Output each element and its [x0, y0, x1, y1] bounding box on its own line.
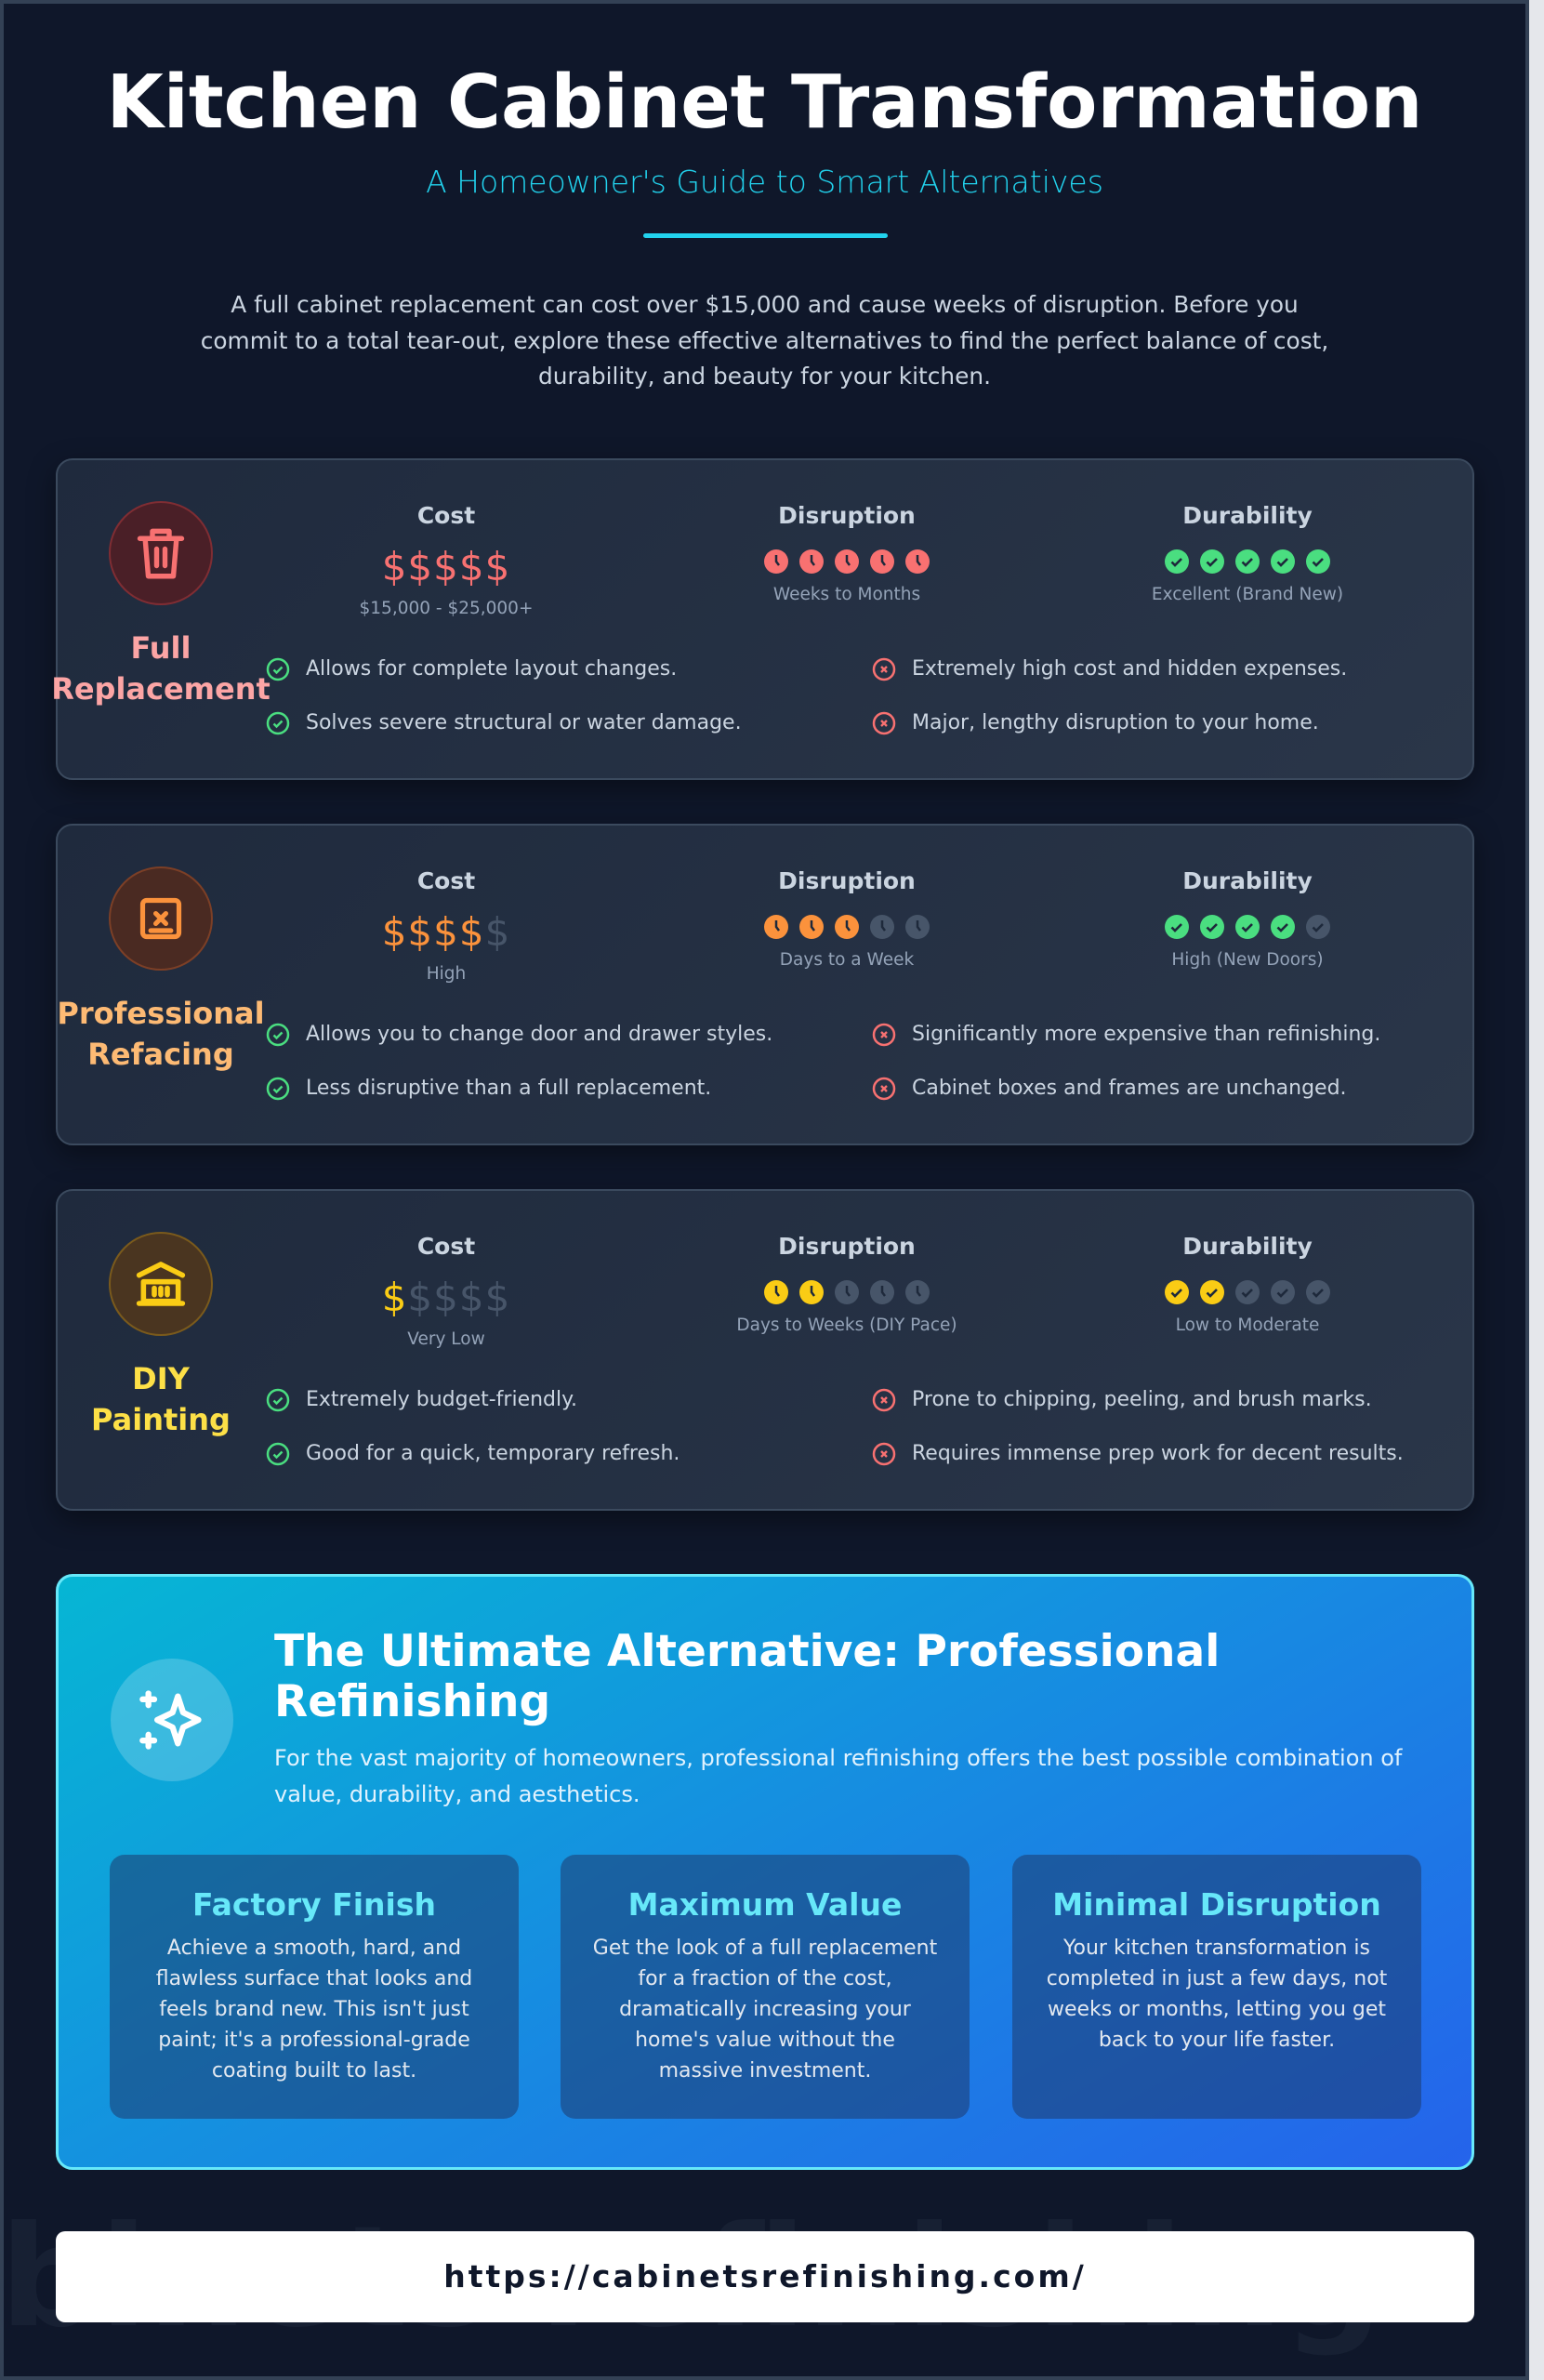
disruption: Disruption — [778, 502, 916, 529]
durability: Durability — [1182, 867, 1313, 894]
label: Painting — [91, 1402, 231, 1437]
icon: door — [109, 866, 213, 971]
panel: professional refacing: Days to a Week — [780, 950, 914, 970]
panel: full replacement: $$$$$ — [382, 544, 510, 589]
intro paragraph: A full cabinet replacement can cost over $15,000 and cause weeks of disruption. Before you commit to a total tear-out, explore these effective alternatives to find the perfect balance of cost, durability, and beauty for your kitchen. — [201, 291, 1328, 390]
subtitle: A Homeowner's Guide to Smart Alternatives — [426, 164, 1103, 200]
panel: professional refacing: High — [427, 964, 466, 984]
pros: Solves severe structural or water damage. — [306, 711, 742, 734]
card: minimal disruption: Minimal Disruption — [1052, 1886, 1381, 1923]
cost: Cost — [417, 867, 475, 894]
panel: ultimate alternative — [56, 1574, 1474, 2170]
panel: full replacement: Excellent (Brand New) — [1152, 585, 1343, 604]
label: Refacing — [87, 1037, 234, 1072]
disruption: Disruption — [778, 867, 916, 894]
panel: professional refacing: $$$$$ — [382, 909, 510, 955]
label: Professional — [57, 996, 265, 1031]
cons: Prone to chipping, peeling, and brush marks. — [912, 1388, 1372, 1411]
card: factory finish: Achieve a smooth, hard, and flawless surface that looks and feels brand new. This isn't just paint; it's a professional-grade coating built to last. — [156, 1937, 472, 2082]
label: Full — [130, 630, 191, 666]
panel: DIY painting — [56, 1189, 1474, 1511]
card: maximum value: Get the look of a full replacement for a fraction of the cost, dramatically increasing your home's value without the massive investment. — [593, 1937, 937, 2082]
title: Kitchen Cabinet Transformation — [107, 60, 1422, 145]
panel: DIY painting: Very Low — [407, 1329, 485, 1349]
cons: Major, lengthy disruption to your home. — [912, 711, 1319, 734]
label — [51, 630, 271, 707]
panel: full replacement: $15,000 - $25,000+ — [360, 599, 533, 618]
heading: The Ultimate Alternative: Professional Refinishing — [274, 1626, 1220, 1727]
description: For the vast majority of homeowners, professional refinishing offers the best possible combination of value, durability, and aesthetics. — [274, 1745, 1402, 1807]
card: factory finish — [110, 1855, 519, 2119]
card: maximum value — [561, 1855, 970, 2119]
panel: DIY painting: $$$$$ — [382, 1275, 510, 1320]
label: DIY — [132, 1361, 190, 1396]
panel: full replacement — [56, 458, 1474, 780]
card: factory finish: Factory Finish — [192, 1886, 436, 1923]
label: Replacement — [51, 671, 271, 707]
cons — [872, 657, 1347, 734]
cost: Cost — [417, 1233, 475, 1260]
pros: Allows for complete layout changes. — [306, 657, 677, 681]
panel: professional refacing — [56, 824, 1474, 1145]
cons — [872, 1388, 1404, 1465]
text: binets refinishing — [0, 2197, 1382, 2359]
cons — [872, 1023, 1380, 1101]
pros — [266, 657, 742, 734]
durability: Durability — [1182, 502, 1313, 529]
footer url — [56, 2231, 1474, 2322]
icon: building — [109, 1232, 213, 1336]
durability: Durability — [1182, 1233, 1313, 1260]
pros — [266, 1023, 772, 1101]
cost: Cost — [417, 502, 475, 529]
card: minimal disruption — [1012, 1855, 1421, 2119]
icon: sparkle — [111, 1659, 233, 1781]
panel: full replacement: Weeks to Months — [773, 585, 920, 604]
pros — [266, 1388, 680, 1465]
cons: Significantly more expensive than refinishing. — [912, 1023, 1380, 1046]
pros: Extremely budget-friendly. — [306, 1388, 577, 1411]
icon: trash — [109, 501, 213, 605]
disruption: Disruption — [778, 1233, 916, 1260]
card: minimal disruption: Your kitchen transformation is completed in just a few days, not weeks or months, letting you get back to your life faster. — [1047, 1937, 1387, 2052]
panel: DIY painting: Low to Moderate — [1176, 1316, 1319, 1335]
panel: DIY painting: Days to Weeks (DIY Pace) — [736, 1316, 957, 1335]
cons: Cabinet boxes and frames are unchanged. — [912, 1077, 1347, 1100]
pros: Allows you to change door and drawer styles. — [306, 1023, 772, 1046]
cons: Extremely high cost and hidden expenses. — [912, 657, 1347, 681]
pros: Less disruptive than a full replacement. — [306, 1077, 711, 1100]
card: maximum value: Maximum Value — [628, 1886, 902, 1923]
panel: professional refacing: High (New Doors) — [1171, 950, 1324, 970]
pros: Good for a quick, temporary refresh. — [306, 1442, 680, 1465]
cons: Requires immense prep work for decent results. — [912, 1442, 1404, 1465]
label — [91, 1361, 231, 1437]
footer url: https://cabinetsrefinishing.com/ — [443, 2258, 1087, 2294]
label — [57, 996, 265, 1072]
